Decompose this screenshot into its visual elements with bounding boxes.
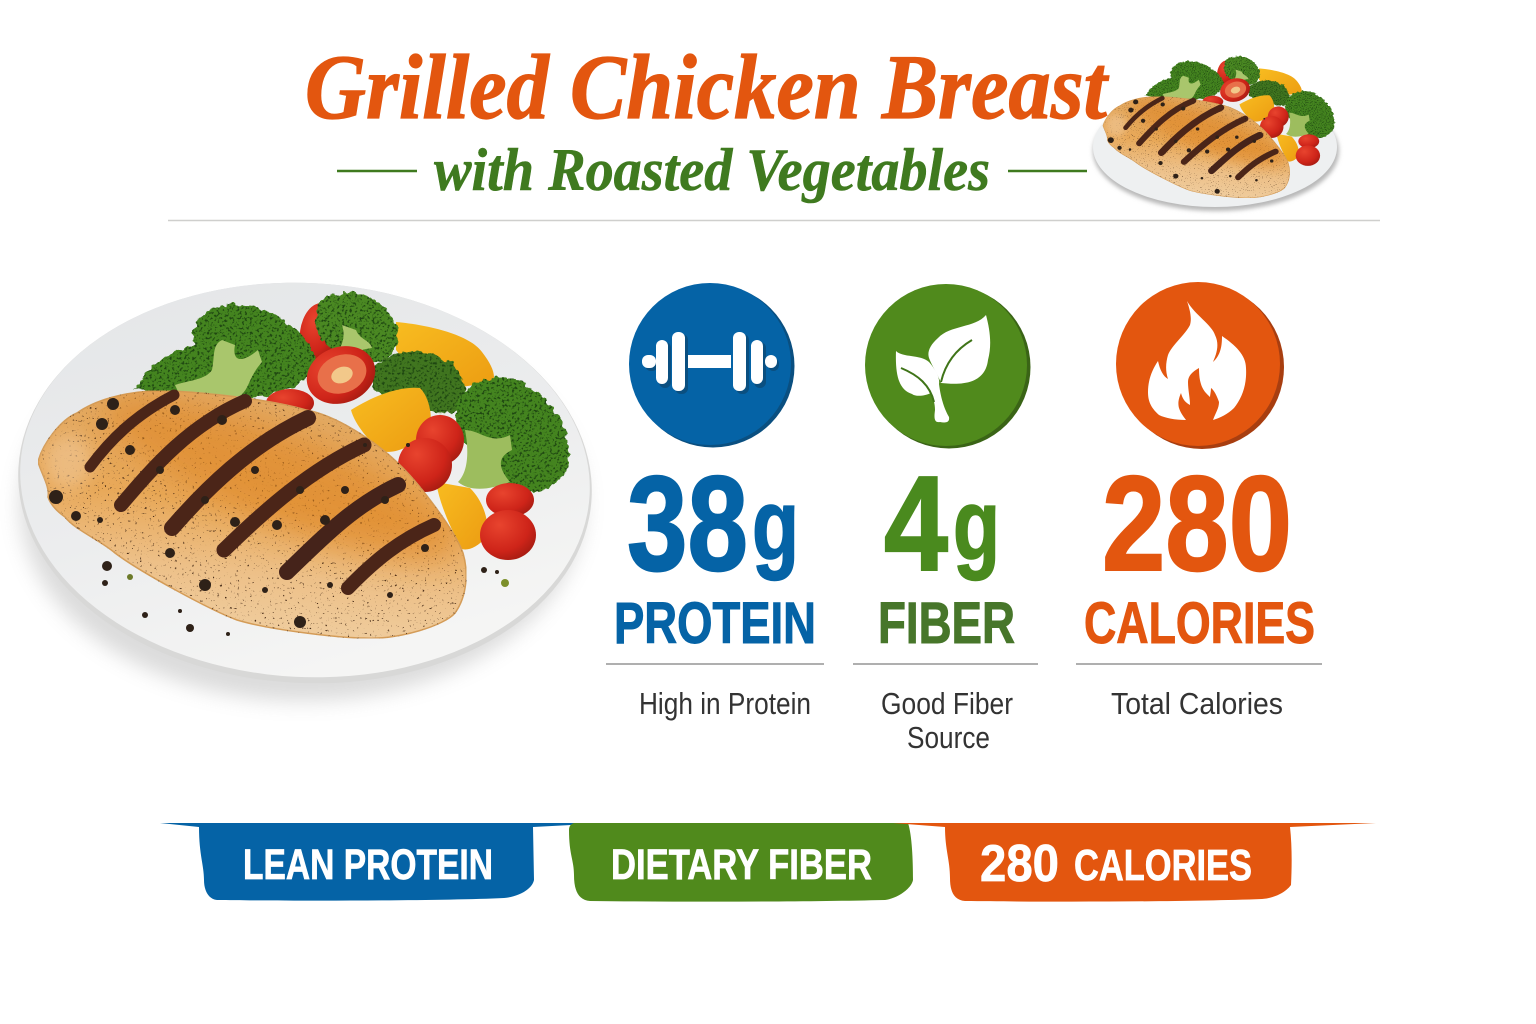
- label: FIBER: [878, 591, 1015, 656]
- plate: [8, 268, 602, 701]
- stat: fiber: [853, 284, 1038, 755]
- value: 4: [884, 448, 948, 599]
- value: [884, 448, 1000, 599]
- divider line: [168, 220, 1380, 222]
- title: Grilled Chicken Breast: [305, 36, 1109, 138]
- food: [38, 293, 569, 638]
- illustration: small plate of chicken and vegetables: [1093, 56, 1339, 211]
- description: Source: [907, 720, 990, 755]
- grill marks: [90, 395, 434, 588]
- value: 280: [1102, 448, 1292, 599]
- value: g: [953, 469, 1000, 581]
- description: Good Fiber: [881, 686, 1013, 721]
- ribbon: lean protein: [160, 823, 609, 901]
- label: PROTEIN: [614, 591, 816, 656]
- subtitle: with Roasted Vegetables: [434, 137, 990, 203]
- chicken breast: [38, 391, 466, 638]
- description: [881, 686, 1013, 755]
- icon: dumbbell: [629, 283, 794, 448]
- icon: leaf: [865, 284, 1030, 448]
- icon: flame: [1116, 282, 1284, 449]
- label: CALORIES: [1084, 591, 1315, 656]
- description: High in Protein: [639, 686, 811, 721]
- plate crumbs: [102, 561, 509, 636]
- ribbon: dietary fiber: [569, 823, 913, 902]
- value: g: [752, 469, 799, 581]
- ribbon: lean protein: LEAN PROTEIN: [243, 841, 493, 889]
- ribbon: 280 calories: 280: [980, 835, 1059, 893]
- seasoning specks: [49, 398, 429, 628]
- ribbon: dietary fiber: DIETARY FIBER: [611, 841, 872, 889]
- description: Total Calories: [1111, 686, 1283, 721]
- stat: protein: [606, 283, 824, 721]
- ribbon: 280 calories: CALORIES: [1074, 841, 1252, 890]
- golden sear: [44, 364, 473, 592]
- ribbon: 280 calories: [893, 823, 1376, 902]
- value: 38: [627, 448, 748, 599]
- stat: calories: [1076, 282, 1322, 721]
- vegetables: [136, 293, 569, 560]
- illustration: chicken plate: [8, 268, 602, 701]
